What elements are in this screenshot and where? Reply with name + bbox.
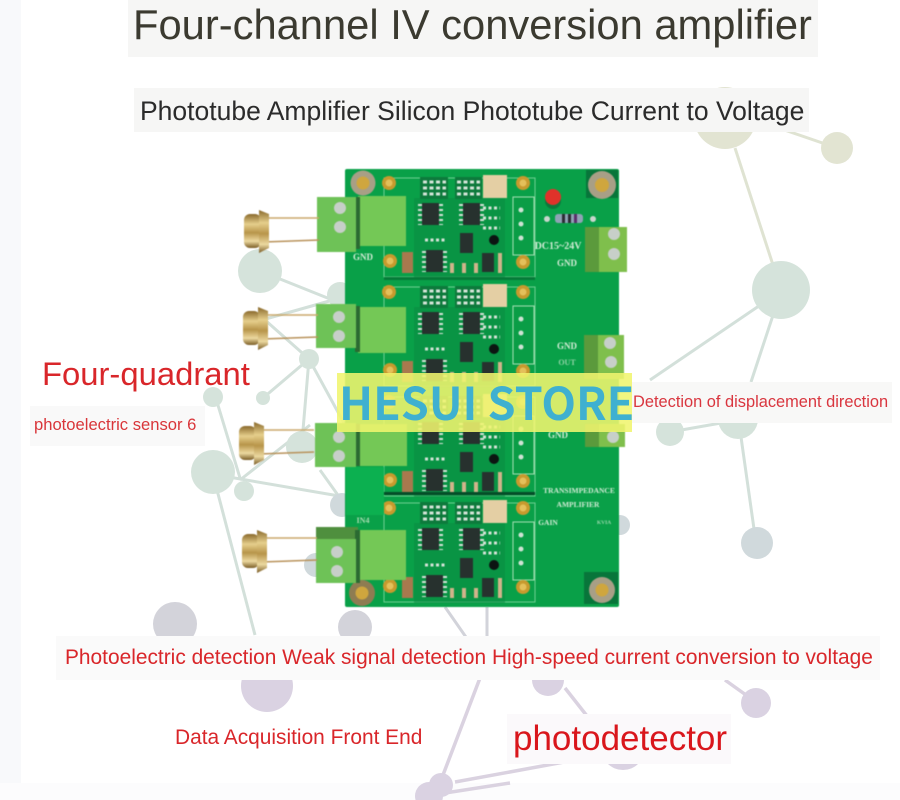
- label: photodetector: photodetector: [513, 719, 727, 758]
- board silk labels: GND: [353, 252, 374, 262]
- board silk labels: TRANSIMPEDANCE: [543, 486, 615, 495]
- subtitle: Phototube Amplifier Silicon Phototube Current to Voltage: [140, 96, 804, 126]
- label: application line: Photoelectric detection Weak signal detection High-speed current conversion to voltage: [65, 646, 873, 669]
- board silk labels: [353, 241, 615, 527]
- label: displacement direction: [632, 382, 892, 423]
- mounting bolts: [349, 170, 618, 606]
- title: Four-channel IV conversion amplifier: [133, 1, 812, 48]
- channel 1: [382, 175, 535, 278]
- input terminal 4: [316, 527, 406, 583]
- board silk labels: GND: [557, 341, 578, 351]
- board silk labels: GAIN: [538, 518, 558, 527]
- board silk labels: OUT: [558, 358, 576, 367]
- board silk labels: IN4: [357, 516, 369, 525]
- board silk labels: GND: [548, 430, 568, 440]
- label: data acquisition: Data Acquisition Front End: [175, 726, 422, 749]
- board silk labels: GND: [557, 258, 578, 268]
- board silk labels: AMPLIFIER: [557, 500, 600, 509]
- subtitle: [134, 88, 809, 132]
- board silk labels: DC15~24V: [535, 241, 582, 252]
- input terminal 1: [317, 196, 406, 252]
- right terminals: [584, 227, 627, 447]
- channel 2: [382, 284, 535, 387]
- label: application line: [56, 636, 880, 680]
- input terminal 3: [315, 423, 407, 467]
- channel 3: [382, 394, 535, 497]
- board silk labels: KVIA: [597, 520, 611, 526]
- label: displacement direction: Detection of displacement direction: [633, 393, 888, 411]
- input terminal 2: [316, 304, 406, 353]
- label: photoelectric sensor: [30, 406, 205, 446]
- channel 4: [382, 500, 535, 603]
- board separators: [346, 277, 535, 515]
- LED and resistor: [544, 189, 596, 223]
- PCB base: [345, 169, 619, 607]
- label: photoelectric sensor: photoelectric sensor 6: [34, 415, 196, 434]
- label: four-quadrant: Four-quadrant: [42, 355, 250, 392]
- photodiode sensors: [239, 210, 319, 573]
- circuit board with sensors: [238, 168, 628, 608]
- store watermark: HESUI STORE: [339, 368, 634, 433]
